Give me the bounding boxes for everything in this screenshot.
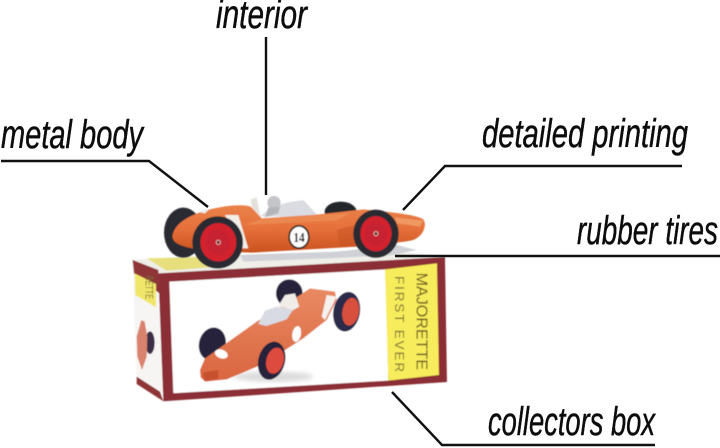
interior with driver bbox=[251, 196, 317, 218]
label: detailed printing bbox=[403, 112, 688, 210]
box front face bbox=[158, 257, 447, 401]
front wheel bbox=[353, 210, 399, 258]
icon: mini car on side bbox=[137, 320, 155, 370]
yellow label bbox=[385, 263, 439, 381]
collectors box bbox=[133, 252, 447, 401]
car body bbox=[172, 205, 425, 253]
label: metal body: metal body bbox=[1, 113, 145, 157]
number roundel bbox=[288, 225, 310, 249]
rear wheel bbox=[192, 216, 243, 268]
brand text: MAJORETTE bbox=[413, 273, 430, 370]
rear wheels behind bbox=[164, 208, 203, 258]
number roundel: 14 bbox=[293, 230, 305, 245]
first ever text: FIRST EVER bbox=[392, 276, 407, 372]
box left face bbox=[133, 260, 163, 401]
label: collectors box bbox=[392, 392, 656, 445]
white stripes bbox=[197, 208, 210, 213]
race car bbox=[164, 196, 425, 268]
box top face bbox=[133, 252, 445, 278]
label: metal body bbox=[1, 113, 208, 207]
icon: car picture on box bbox=[195, 279, 363, 383]
shadow bbox=[240, 245, 417, 262]
collectors box: RETTE bbox=[143, 276, 155, 299]
